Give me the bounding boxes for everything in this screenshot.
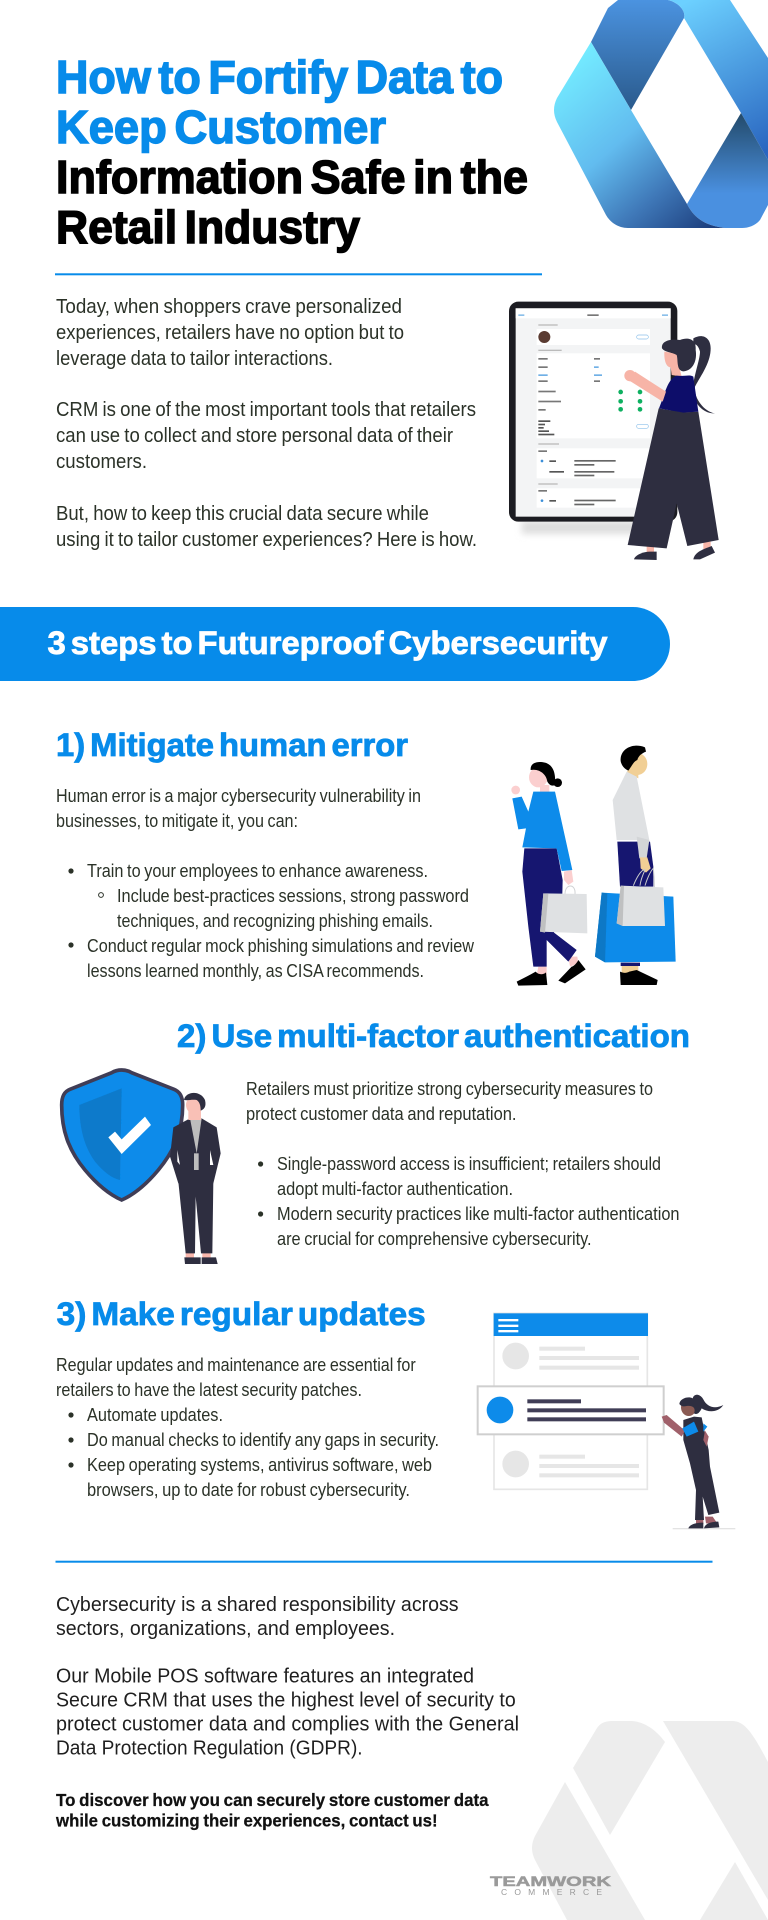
- man in suit: [170, 1093, 221, 1264]
- text: step 3: Automate updates.: [87, 1404, 223, 1425]
- man shopper: [595, 746, 676, 985]
- heading: step 3: 3) Make regular updates: [57, 1296, 426, 1332]
- illustration: shoppers with bags: [511, 746, 676, 986]
- text: step 1: lessons learned monthly, as CISA recommends.: [87, 960, 424, 981]
- intro text: Today, when shoppers crave personalized: [56, 296, 402, 318]
- closing text: sectors, organizations, and employees.: [56, 1618, 395, 1640]
- text: step 2: adopt multi-factor authentication.: [277, 1178, 513, 1199]
- icon: shield: [62, 1070, 183, 1200]
- woman shopper: [511, 762, 587, 986]
- call to action: [55, 1790, 489, 1831]
- text: step 1: [56, 785, 475, 981]
- closing text: Data Protection Regulation (GDPR).: [56, 1738, 363, 1760]
- woman with ponytail: [662, 1395, 735, 1529]
- banner: 3 steps: 3 steps to Futureproof Cybersecurity: [48, 625, 608, 661]
- call to action: To discover how you can securely store customer data: [56, 1790, 489, 1810]
- text: step 3: Keep operating systems, antivirus software, web: [87, 1454, 432, 1475]
- text: step 2: Single-password access is insufficient; retailers should: [277, 1153, 661, 1174]
- intro text: customers.: [56, 451, 147, 473]
- title: Keep Customer: [56, 101, 386, 153]
- text: step 2: Retailers must prioritize strong cybersecurity measures to: [246, 1078, 653, 1099]
- title: Information Safe in the: [56, 151, 528, 203]
- woman pointing at tablet: [624, 336, 719, 560]
- text: step 3: Do manual checks to identify any gaps in security.: [87, 1429, 439, 1450]
- text: step 3: retailers to have the latest security patches.: [56, 1379, 362, 1400]
- banner: 3 steps: [0, 607, 670, 681]
- text: step 1: Conduct regular mock phishing simulations and review: [87, 935, 475, 956]
- title: How to Fortify Data to: [56, 51, 503, 103]
- text: step 2: Modern security practices like multi-factor authentication: [277, 1203, 680, 1224]
- logo: Teamwork Commerce: COMMERCE: [501, 1887, 602, 1897]
- text: step 2: protect customer data and reputation.: [246, 1103, 516, 1124]
- intro text: But, how to keep this crucial data secure while: [56, 503, 429, 525]
- intro text: experiences, retailers have no option but to: [56, 322, 404, 344]
- logo: Teamwork Commerce: TEAMWORK: [490, 1873, 611, 1889]
- logo: blue ribbon hexagon: [554, 0, 768, 228]
- illustration: shield with man: [62, 1070, 221, 1264]
- text: step 1: businesses, to mitigate it, you can:: [56, 810, 298, 831]
- text: step 3: Regular updates and maintenance are essential for: [56, 1354, 416, 1375]
- text: step 2: are crucial for comprehensive cybersecurity.: [277, 1228, 592, 1249]
- text: step 3: [56, 1354, 439, 1500]
- text: step 2: [246, 1078, 680, 1249]
- watermark: faded logo: [532, 1721, 768, 1920]
- front card: [478, 1386, 664, 1434]
- text: step 1: techniques, and recognizing phishing emails.: [117, 910, 433, 931]
- illustration: tablet with woman: [509, 302, 719, 560]
- title: Retail Industry: [56, 201, 360, 253]
- text: step 1: Train to your employees to enhance awareness.: [87, 860, 428, 881]
- intro text: can use to collect and store personal data of their: [56, 425, 453, 447]
- closing text: [56, 1594, 519, 1760]
- closing text: protect customer data and complies with the General: [56, 1714, 519, 1736]
- closing text: Secure CRM that uses the highest level of security to: [56, 1690, 516, 1712]
- heading: step 2: 2) Use multi-factor authentication: [177, 1018, 690, 1054]
- intro text: using it to tailor customer experiences? Here is how.: [56, 529, 477, 551]
- text: step 1: Include best-practices sessions, strong password: [117, 885, 469, 906]
- closing text: Cybersecurity is a shared responsibility across: [56, 1594, 459, 1616]
- illustration: list cards with woman: [478, 1313, 735, 1529]
- call to action: while customizing their experiences, contact us!: [55, 1811, 438, 1831]
- logo: Teamwork Commerce: [490, 1873, 611, 1897]
- text: step 3: browsers, up to date for robust cybersecurity.: [87, 1479, 410, 1500]
- intro text: leverage data to tailor interactions.: [56, 348, 333, 370]
- heading: step 1: 1) Mitigate human error: [56, 727, 408, 763]
- title: [56, 51, 528, 253]
- intro text: [56, 296, 477, 551]
- intro text: CRM is one of the most important tools that retailers: [56, 399, 476, 421]
- text: step 1: Human error is a major cybersecurity vulnerability in: [56, 785, 421, 806]
- closing text: Our Mobile POS software features an integrated: [56, 1666, 474, 1688]
